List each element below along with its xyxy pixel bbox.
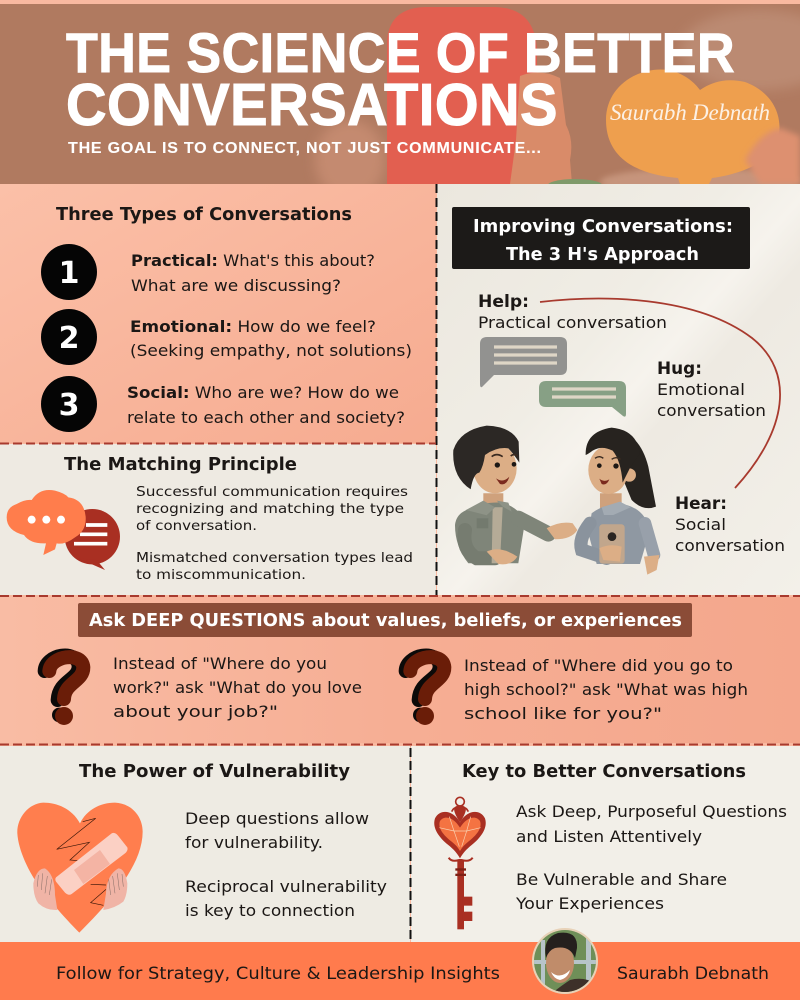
icon: green object [548,179,602,184]
item 3 [41,376,405,432]
icon: question mark left [45,656,83,725]
icon: chat bubbles [7,490,120,570]
label: help: Practical conversation [478,313,667,332]
heading: matching principle: The Matching Principle [64,454,297,475]
divider lines [0,184,800,942]
icon: raised hand [510,72,572,184]
icon: green speech bubble [539,381,626,417]
item 1: What are we discussing? [131,276,341,295]
text: vulnerability body: Reciprocal vulnerability [185,877,387,896]
label: help: Help: [478,292,529,312]
banner: ask deep questions: Ask DEEP QUESTIONS about values, beliefs, or experiences [89,610,682,631]
icon: bandaged heart [17,803,143,933]
text: question right: Instead of "Where did you go to [464,656,733,675]
text: vulnerability body [185,809,387,920]
text: question right: school like for you?" [464,704,662,723]
label: hug: conversation [657,401,766,420]
heading box: 3 H's approach: The 3 H's Approach [506,244,699,265]
icon: orange speech bubble [606,69,780,190]
text: vulnerability body: is key to connection [185,901,355,920]
text: key body: Be Vulnerable and Share [516,870,727,889]
label: hug [657,359,766,420]
icon: heart key [434,797,486,929]
item 2: (Seeking empathy, not solutions) [130,341,412,360]
banner: ask deep questions [78,603,692,637]
text: follow line: Follow for Strategy, Culture & Leadership Insights [56,964,500,983]
text: key body: Your Experiences [515,894,664,913]
text: matching body: to miscommunication. [136,567,306,583]
label: hear: conversation [675,536,785,555]
icon: gray speech bubble [480,337,567,387]
item 1 [41,244,375,300]
icon: second hand [745,128,800,184]
panel: header banner [0,4,800,200]
heading box: 3 H's approach [452,207,750,269]
text: question left: work?" ask "What do you love [113,678,362,697]
text: matching body [136,484,413,583]
item 2 [41,309,412,365]
icon: question mark right [406,656,444,725]
text: key body: Ask Deep, Purposeful Questions [516,802,787,821]
text: question left [113,654,362,721]
label: help [478,292,667,332]
heading: power of vulnerability: The Power of Vulnerability [79,761,350,782]
panel: power of vulnerability [0,746,410,942]
text: matching body: Mismatched conversation types lead [136,550,413,566]
item 2: Emotional: How do we feel? [130,317,376,336]
heading box: 3 H's approach: Improving Conversations: [473,216,733,237]
signature: Saurabh Debnath [610,100,770,125]
subtitle: THE GOAL IS TO CONNECT, NOT JUST COMMUNICATE... [68,140,541,157]
item 3: 3 [59,388,79,423]
panel: three types of conversations [0,184,436,443]
title: THE SCIENCE OF BETTER [66,21,735,84]
panel: key to better conversations [411,746,800,942]
text: author name: Saurabh Debnath [617,964,769,983]
text: question right [464,656,748,723]
label: hear: Hear: [675,494,727,514]
title [66,21,735,138]
label: hug: Hug: [657,359,702,379]
illustration: woman [581,428,659,575]
text: question right: high school?" ask "What was high [464,680,748,699]
icon: red speech bubble [387,7,537,184]
panel: footer [0,925,800,1000]
text: matching body: recognizing and matching the type [136,501,404,517]
icon: author portrait [532,928,598,994]
arrow: connecting curve [540,299,780,488]
text: question left: about your job?" [113,702,278,721]
text: key body [515,802,787,913]
title: CONVERSATIONS [66,72,558,138]
panel: improving conversations [437,184,800,595]
label: hug: Emotional [657,380,745,399]
text: key body: and Listen Attentively [516,827,702,846]
text: question left: Instead of "Where do you [113,654,327,673]
label: hear: Social [675,515,726,534]
item 2: 2 [59,321,79,356]
heading: key to better conversations: Key to Better Conversations [462,761,746,782]
heading: three types: Three Types of Conversations [56,204,352,225]
label: hear [675,494,785,555]
item 3: Social: Who are we? How do we [127,383,399,402]
panel: deep questions [0,597,800,743]
panel: matching principle [0,444,436,595]
item 3: relate to each other and society? [127,408,405,427]
text: vulnerability body: for vulnerability. [185,833,323,852]
text: vulnerability body: Deep questions allow [185,809,369,828]
item 1: 1 [59,256,79,291]
illustration: man [453,426,577,564]
text: matching body: of conversation. [136,518,257,534]
text: matching body: Successful communication requires [136,484,408,500]
item 1: Practical: What's this about? [131,251,375,270]
